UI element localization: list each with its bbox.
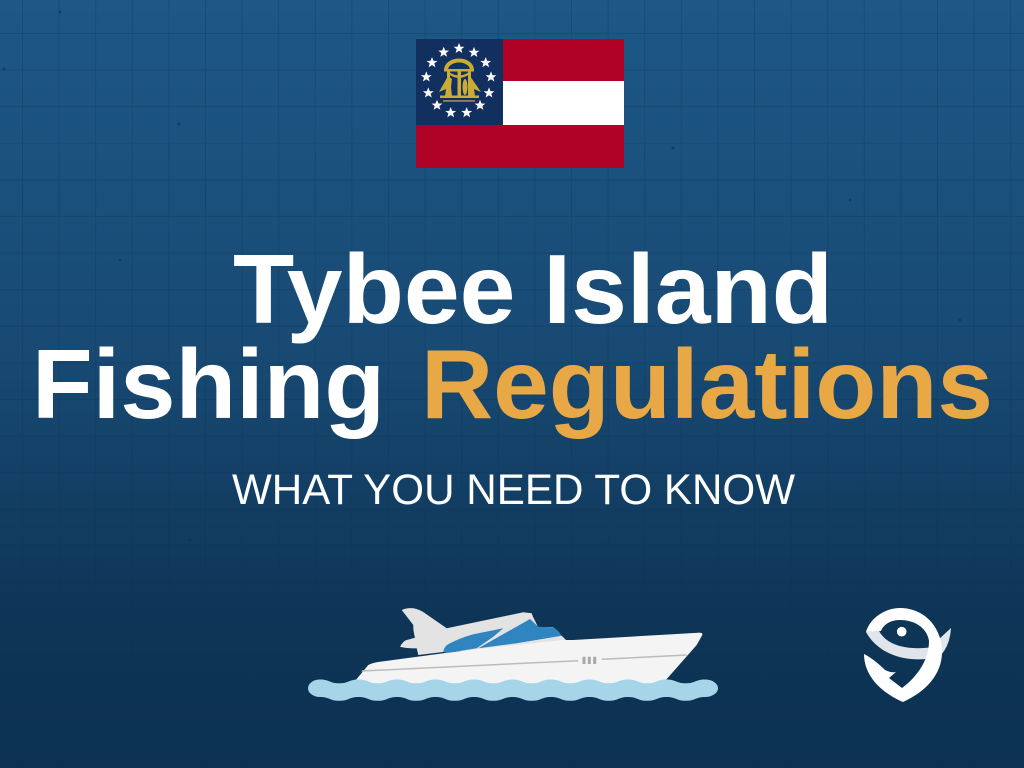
icon: motor yacht on waves <box>308 608 718 701</box>
water waves <box>308 680 718 701</box>
boat side window <box>443 628 503 653</box>
logo tail <box>934 628 951 657</box>
icon: fish hook logo <box>864 608 951 702</box>
boat vents <box>584 657 595 664</box>
title line 2 accent: Regulations <box>421 329 993 439</box>
title: Tybee Island Fishing Regulations <box>32 234 993 439</box>
title line 2 white: Fishing <box>32 329 385 439</box>
boat windshield <box>478 619 562 648</box>
logo eye <box>897 627 906 636</box>
boat hull stripe <box>362 655 687 671</box>
logo white hook outline <box>864 608 942 702</box>
logo fish body band <box>866 631 934 659</box>
icon: Georgia state flag <box>416 39 624 168</box>
boat hull <box>355 633 702 690</box>
flag canton <box>416 39 503 125</box>
boat flybridge fin <box>400 608 566 655</box>
subtitle: WHAT YOU NEED TO KNOW <box>232 466 795 514</box>
title line 1: Tybee Island <box>233 234 833 344</box>
